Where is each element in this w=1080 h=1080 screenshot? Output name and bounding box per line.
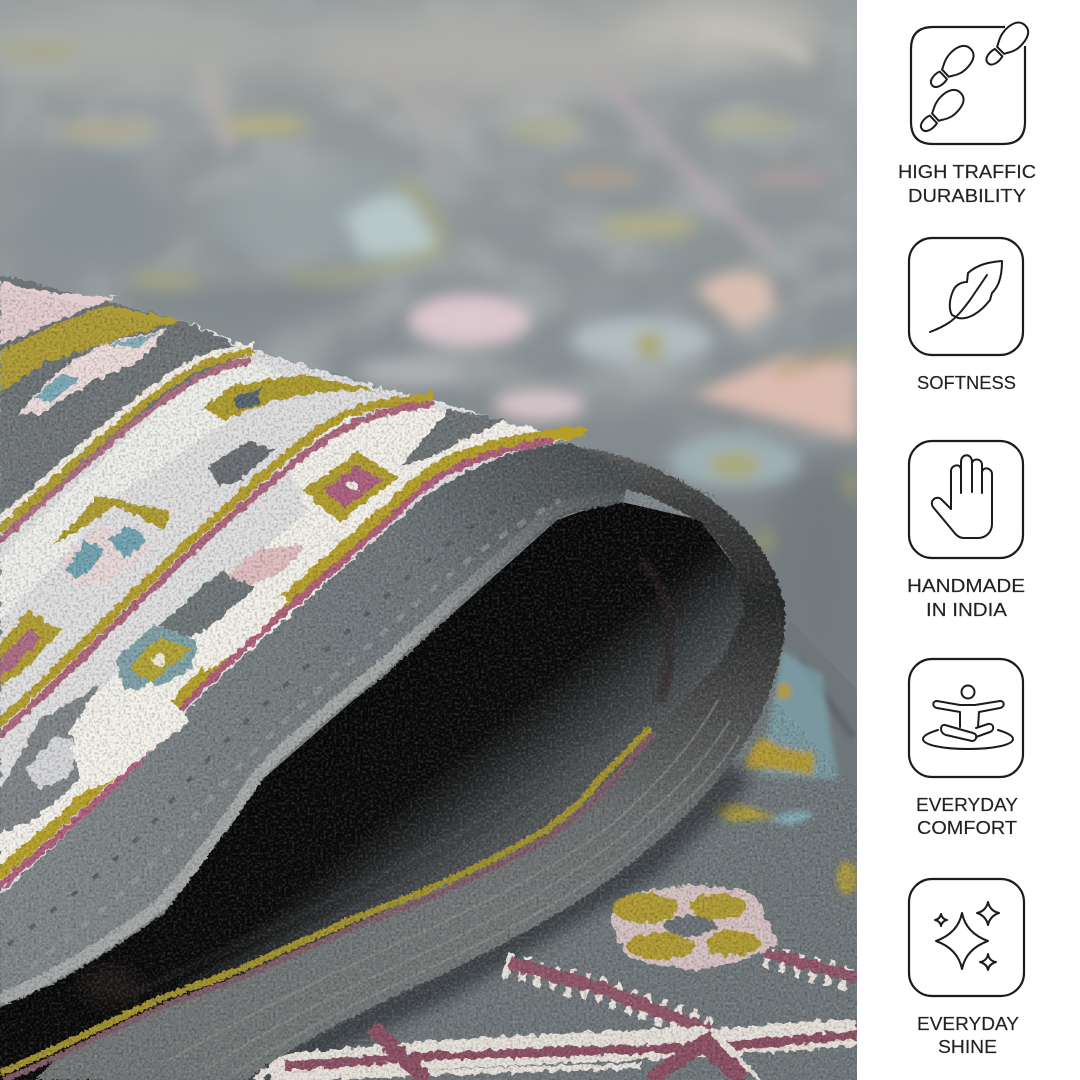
label: handmade in india bbox=[907, 576, 1025, 620]
label: high traffic durability: DURABILITY bbox=[908, 186, 1026, 206]
feature: everyday shine bbox=[909, 879, 1024, 1057]
feature: everyday comfort bbox=[909, 659, 1023, 838]
feature: softness bbox=[909, 238, 1023, 393]
shadow under the roll bbox=[240, 770, 740, 1080]
gray field band bbox=[0, 335, 250, 535]
icon: sparkles in rounded square bbox=[909, 879, 1024, 996]
feature: high traffic durability bbox=[898, 18, 1036, 206]
medallion motif with gold ovals bbox=[612, 885, 778, 970]
rolled hem, outer curve bbox=[35, 447, 785, 1080]
border stripes gold and pink bbox=[0, 347, 580, 886]
lower right rug pattern in focus bbox=[240, 620, 857, 1080]
label: high traffic durability bbox=[898, 162, 1036, 206]
label: everyday shine: EVERYDAY bbox=[917, 1014, 1019, 1034]
border motifs bbox=[0, 374, 507, 832]
icon: feather in rounded square bbox=[909, 238, 1023, 355]
label: everyday comfort: EVERYDAY bbox=[916, 795, 1018, 815]
icon: open hand in rounded square bbox=[909, 441, 1023, 558]
label: everyday shine bbox=[917, 1014, 1019, 1057]
white field highlights bbox=[0, 360, 540, 880]
hem rib lines bbox=[170, 700, 740, 1075]
feature: handmade in india bbox=[907, 441, 1025, 620]
label: handmade in india: HANDMADE bbox=[907, 576, 1025, 596]
label: everyday comfort bbox=[916, 795, 1018, 838]
rug face with border pattern bbox=[0, 275, 580, 895]
rug close-up photo illustration bbox=[0, 0, 857, 1080]
label: everyday comfort: COMFORT bbox=[917, 818, 1017, 838]
underside woven border stripe bbox=[0, 728, 655, 1080]
rolled rug underside, dark hollow bbox=[0, 500, 760, 1080]
label: everyday shine: SHINE bbox=[938, 1037, 997, 1057]
pink and white lattice bbox=[255, 953, 857, 1080]
panel: feature icons on white column bbox=[898, 22, 1036, 1057]
label: handmade in india: IN INDIA bbox=[926, 600, 1007, 620]
label: high traffic durability: HIGH TRAFFIC bbox=[898, 162, 1036, 182]
outer gray binding band of rug bbox=[0, 443, 640, 1007]
binding stitches bbox=[0, 485, 625, 1000]
woven pile texture overlay bbox=[0, 286, 857, 1080]
corner motif bbox=[0, 275, 250, 480]
icon: footprints in rounded square bbox=[911, 18, 1033, 144]
icon: meditating figure in rounded square bbox=[909, 659, 1023, 777]
label: softness: SOFTNESS bbox=[917, 373, 1016, 393]
